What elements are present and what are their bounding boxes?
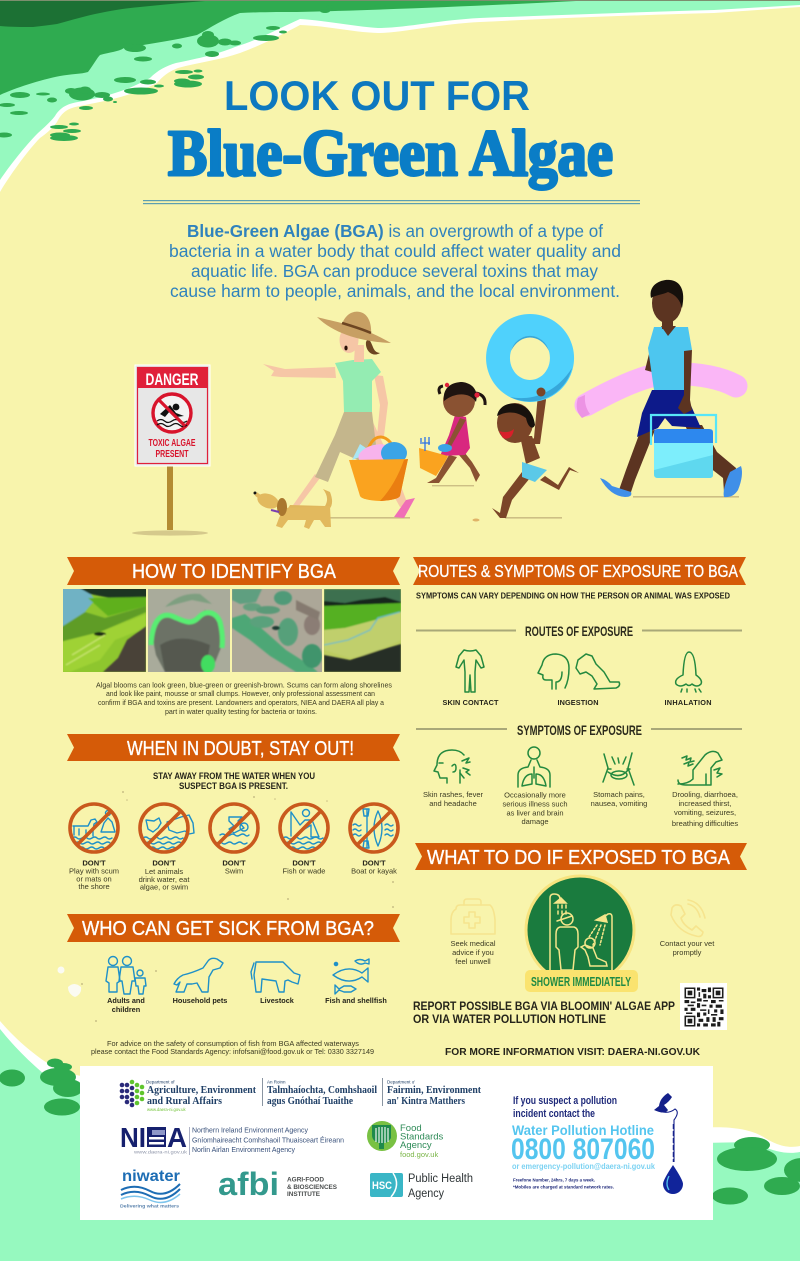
water pollution hotline: Freefone Number, 24hrs, 7 days a week. bbox=[513, 1178, 595, 1184]
seek medical caption: feel unwell bbox=[455, 957, 491, 966]
title line two: Blue-Green Algae bbox=[168, 117, 613, 190]
icon: ingestion bbox=[538, 654, 620, 689]
icon: no fishing or wading bbox=[280, 804, 328, 852]
who captions: Livestock bbox=[260, 996, 295, 1005]
mint water strip along bottom bbox=[0, 1210, 800, 1261]
logo: afbi: INSTITUTE bbox=[287, 1192, 320, 1198]
photo: green ring of algae bbox=[148, 589, 230, 673]
symptom captions: breathing difficulties bbox=[672, 819, 738, 828]
logo: Food Standards Agency: Agency bbox=[400, 1140, 432, 1151]
shower immediately bbox=[525, 876, 638, 992]
report instruction bbox=[413, 1001, 675, 1026]
woman with bucket bbox=[263, 312, 415, 519]
water pollution hotline: 0800 807060 bbox=[511, 1133, 655, 1166]
logo: DAERA: an' Kintra Matthers bbox=[387, 1096, 465, 1107]
identify description: confirm if BGA and toxins are present. Landowners and operators, NIEA and DAERA all play a bbox=[98, 698, 385, 707]
symptom captions: as liver and brain bbox=[506, 808, 564, 818]
logo: DAERA: agus Gnóthaí Tuaithe bbox=[267, 1096, 353, 1107]
banner: how to identify bbox=[67, 557, 400, 585]
don't captions bbox=[69, 858, 397, 892]
logo: NIEA: Northern Ireland Environment Agency bbox=[192, 1128, 308, 1134]
panel: when in doubt bbox=[67, 734, 400, 892]
food standards advice: please contact the Food Standards Agency: infofsani@food.gov.uk or Tel: 0330 3327149 bbox=[91, 1047, 374, 1056]
symptom captions: Drooling, diarrhoea, bbox=[672, 790, 738, 799]
panel: how to identify BGA bbox=[60, 557, 401, 716]
stay away instruction: STAY AWAY FROM THE WATER WHEN YOU bbox=[153, 771, 315, 782]
icon: telephone bbox=[671, 900, 705, 936]
icon: phone cord and water drop bbox=[654, 1093, 683, 1194]
title line one: LOOK OUT FOR bbox=[224, 72, 530, 119]
stay away instruction bbox=[153, 771, 315, 792]
don't captions: DON'T bbox=[362, 858, 386, 868]
logo: NIEA bbox=[120, 1122, 344, 1156]
don't captions: Play with scum bbox=[69, 866, 119, 876]
don't captions: DON'T bbox=[292, 858, 316, 868]
intro text: aquatic life. BGA can produce several toxins that may bbox=[191, 261, 598, 281]
logo: afbi: afbi bbox=[218, 1166, 279, 1202]
heading: symptoms of exposure: SYMPTOMS OF EXPOSURE bbox=[517, 722, 642, 738]
logo: Food Standards Agency: Standards bbox=[400, 1132, 444, 1142]
banner: how to identify: HOW TO IDENTIFY BGA bbox=[132, 561, 337, 583]
logo: NI Water bbox=[120, 1168, 180, 1210]
shoreline water and algae, top bbox=[0, 0, 800, 192]
intro text: bacteria in a water body that could affect water quality and bbox=[169, 241, 621, 261]
symptom captions: Skin rashes, fever bbox=[423, 790, 484, 799]
panel: who can get sick bbox=[58, 914, 400, 1056]
don't captions: DON'T bbox=[82, 858, 106, 868]
contact your vet caption bbox=[660, 939, 715, 957]
logo: DAERA: www.daera-ni.gov.uk bbox=[147, 1107, 186, 1112]
shoreline water and algae, bottom right bbox=[700, 1127, 800, 1261]
logo: NIEA: Norlin Airlan Environment Agency bbox=[192, 1147, 295, 1154]
icon: livestock bbox=[251, 962, 300, 992]
QR code bbox=[680, 983, 727, 1030]
logo: DAERA: and Rural Affairs bbox=[147, 1096, 222, 1107]
intro text bbox=[169, 221, 621, 301]
identify description: part in water quality testing for bacteria or toxins. bbox=[165, 707, 317, 716]
icon: stomach pains bbox=[603, 753, 634, 785]
water pollution hotline: If you suspect a pollution bbox=[513, 1095, 617, 1107]
icon: inhalation bbox=[676, 652, 701, 692]
logo: Public Health Agency: Agency bbox=[408, 1188, 444, 1200]
panel: logos and hotline bbox=[80, 1066, 713, 1220]
route captions: INGESTION bbox=[558, 698, 598, 707]
man with pool noodle and cooler bbox=[577, 280, 742, 498]
don't captions: DON'T bbox=[152, 858, 176, 868]
who captions: Fish and shellfish bbox=[325, 996, 387, 1005]
heading: routes of exposure: ROUTES OF EXPOSURE bbox=[525, 623, 633, 639]
shower label: SHOWER IMMEDIATELY bbox=[531, 975, 631, 989]
banner: when in doubt bbox=[67, 734, 400, 761]
danger sign: PRESENT bbox=[156, 448, 189, 460]
logo: Public Health Agency: HSC bbox=[372, 1180, 392, 1192]
symptom captions: Stomach pains, bbox=[593, 790, 645, 799]
don't captions: Let animals bbox=[145, 867, 183, 876]
who captions: Adults and bbox=[107, 996, 145, 1005]
danger sign bbox=[132, 365, 210, 536]
icon: rash and headache bbox=[434, 750, 470, 783]
water pollution hotline: or emergency-pollution@daera-ni.gov.uk bbox=[512, 1162, 656, 1171]
symptom captions: increased thirst, bbox=[679, 799, 731, 808]
symptom captions: serious illness such bbox=[502, 800, 568, 808]
logo: NI Water: niwater bbox=[122, 1168, 180, 1185]
photo: yellow-green bloom on shore bbox=[324, 589, 401, 672]
don't captions: or mats on bbox=[76, 874, 112, 884]
who captions: children bbox=[112, 1005, 140, 1014]
panel: routes and symptoms bbox=[413, 557, 746, 828]
don't captions: algae, or swim bbox=[140, 882, 188, 892]
logo: DAERA: Fairmin, Environment bbox=[387, 1085, 481, 1096]
icon: lungs and brain illness bbox=[518, 747, 550, 787]
panel: what to do if exposed bbox=[413, 843, 747, 1058]
identify description: Algal blooms can look green, blue-green or greenish-brown. Scums can form along shorelines bbox=[96, 680, 392, 690]
water pollution hotline bbox=[511, 1093, 683, 1194]
water pollution hotline: Water Pollution Hotline bbox=[512, 1123, 654, 1138]
water pollution hotline: incident contact the bbox=[513, 1108, 595, 1120]
danger sign: DANGER bbox=[146, 370, 198, 389]
logo: Food Standards Agency bbox=[367, 1121, 444, 1159]
logo: DAERA: Department of bbox=[146, 1080, 175, 1084]
symptom captions: vomiting, seizures, bbox=[674, 808, 736, 817]
don't captions: DON'T bbox=[222, 858, 246, 868]
banner: what to do: WHAT TO DO IF EXPOSED TO BGA bbox=[427, 847, 731, 869]
logo: NIEA: A bbox=[167, 1122, 187, 1153]
seek medical caption: advice if you bbox=[452, 948, 494, 957]
girl with bucket bbox=[419, 382, 485, 486]
route captions: SKIN CONTACT bbox=[442, 698, 499, 707]
contact your vet caption: promptly bbox=[673, 948, 702, 957]
symptom captions: and headache bbox=[429, 799, 477, 808]
logo: Public Health Agency bbox=[370, 1173, 473, 1200]
icon: sick dog bbox=[678, 751, 722, 785]
icon: medical kit bbox=[451, 899, 495, 934]
logo: DAERA: An Roinn bbox=[267, 1080, 286, 1084]
danger sign: TOXIC ALGAE bbox=[148, 437, 196, 449]
banner: when in doubt: WHEN IN DOUBT, STAY OUT! bbox=[127, 738, 354, 760]
food standards advice: For advice on the safety of consumption of fish from BGA affected waterways bbox=[107, 1039, 359, 1048]
banner: routes and symptoms bbox=[413, 557, 746, 585]
route captions bbox=[442, 698, 712, 707]
don't captions: Swim bbox=[225, 866, 243, 876]
seek medical caption bbox=[450, 939, 496, 966]
logo: Public Health Agency: Public Health bbox=[408, 1173, 473, 1185]
symptom captions bbox=[423, 790, 738, 828]
report instruction: OR VIA WATER POLLUTION HOTLINE bbox=[413, 1014, 606, 1026]
dog bbox=[254, 489, 332, 529]
algae clumps, bottom right bbox=[712, 1137, 800, 1204]
intro text: Blue-Green Algae (BGA) is an overgrowth of a type of bbox=[187, 221, 603, 241]
icon: no playing on shore bbox=[70, 804, 118, 852]
seek medical caption: Seek medical bbox=[450, 939, 496, 948]
symptom captions: nausea, vomiting bbox=[591, 799, 647, 808]
boy with ring bbox=[472, 314, 579, 522]
don't captions: Boat or kayak bbox=[351, 866, 397, 876]
icon: adults and children bbox=[106, 956, 146, 994]
don't captions: Fish or wade bbox=[283, 866, 325, 876]
who captions: Household pets bbox=[173, 996, 227, 1005]
logo: Food Standards Agency: Food bbox=[400, 1123, 422, 1134]
don't captions: drink water, eat bbox=[139, 875, 190, 884]
banner: who can get sick: WHO CAN GET SICK FROM BGA? bbox=[82, 918, 374, 940]
logo: DAERA: Talmhaíochta, Comhshaoil bbox=[267, 1085, 377, 1096]
logo: NIEA: www.daera-ni.gov.uk bbox=[134, 1150, 188, 1156]
specks of sand bbox=[81, 791, 394, 1022]
symptoms vary note: SYMPTOMS CAN VARY DEPENDING ON HOW THE PERSON OR ANIMAL WAS EXPOSED bbox=[416, 590, 730, 600]
identify description bbox=[96, 680, 392, 716]
shoreline water and algae, bottom left bbox=[0, 1021, 100, 1261]
logo: DAERA: Agriculture, Environment bbox=[147, 1085, 256, 1096]
report instruction: REPORT POSSIBLE BGA VIA BLOOMIN' ALGAE APP bbox=[413, 1001, 675, 1013]
algae clumps, top bbox=[0, 4, 409, 141]
icon: fish and shellfish bbox=[333, 959, 369, 994]
photo: lake shore with green scum bbox=[63, 589, 146, 672]
logo: afbi bbox=[218, 1166, 337, 1202]
photo: patchy blue-green mats bbox=[232, 589, 322, 672]
more information: FOR MORE INFORMATION VISIT: DAERA-NI.GOV.UK bbox=[445, 1046, 700, 1058]
icon: skin contact bbox=[456, 650, 484, 692]
title bbox=[168, 72, 613, 190]
logo: NIEA: NI bbox=[120, 1122, 146, 1153]
logo: NI Water: Delivering what matters bbox=[120, 1204, 179, 1210]
logo: NIEA: Gníomhaireacht Comhshaoil Thuaisceart Éireann bbox=[192, 1136, 344, 1144]
logo: DAERA bbox=[120, 1078, 481, 1112]
logo: Food Standards Agency: food.gov.uk bbox=[400, 1150, 438, 1159]
icon: no swimming bbox=[210, 804, 258, 852]
intro text: cause harm to people, animals, and the local environment. bbox=[170, 281, 620, 301]
who captions bbox=[107, 996, 387, 1014]
algae clumps, bottom left bbox=[0, 1058, 83, 1116]
stay away instruction: SUSPECT BGA IS PRESENT. bbox=[179, 781, 288, 792]
symptom captions: Occasionally more bbox=[504, 790, 566, 800]
logo: afbi: AGRI-FOOD bbox=[287, 1178, 325, 1184]
water pollution hotline: *Mobiles are charged at standard network rates. bbox=[513, 1184, 614, 1190]
don't captions: the shore bbox=[78, 882, 110, 891]
route captions: INHALATION bbox=[664, 698, 712, 707]
logo: DAERA: Department o' bbox=[387, 1080, 415, 1084]
icon: household pets bbox=[174, 958, 223, 992]
symptom captions: damage bbox=[521, 817, 549, 826]
food standards advice bbox=[91, 1039, 374, 1056]
contact your vet caption: Contact your vet bbox=[660, 939, 715, 948]
icon: sea shells bbox=[58, 966, 81, 997]
logo: afbi: & BIOSCIENCES bbox=[287, 1185, 337, 1191]
identify description: and look like paint, mousse or small clumps. However, only professional assessment can bbox=[106, 689, 375, 698]
icon: no animals in water bbox=[140, 804, 194, 852]
icon: no boating bbox=[350, 804, 398, 852]
